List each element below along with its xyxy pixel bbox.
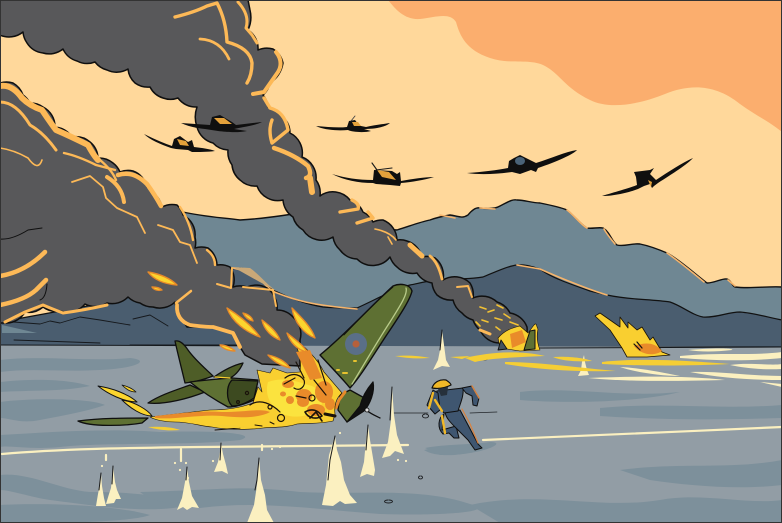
face (438, 387, 448, 396)
propeller (372, 163, 392, 170)
wreck puff highlights (476, 305, 518, 330)
plane: lower centre (332, 163, 434, 186)
plane: tail section (78, 341, 258, 425)
orange fire patches (155, 350, 335, 418)
canopy (377, 170, 396, 180)
plane: upper centre (316, 116, 390, 132)
distant fire core (634, 343, 662, 354)
mountain ridge band (233, 267, 278, 292)
distant fire char (634, 342, 642, 350)
canopy (177, 139, 189, 146)
main fire (150, 337, 342, 430)
horizon line (0, 345, 782, 348)
upper smoke highlights (175, 2, 490, 334)
soldier shadow (424, 447, 476, 455)
propeller (347, 382, 380, 422)
back leg (439, 414, 459, 438)
leg orange stripe (462, 409, 478, 443)
crossing wake line (2, 427, 782, 454)
distant fire (595, 313, 670, 357)
plane: back left (144, 134, 215, 152)
wing edge highlight (352, 288, 406, 384)
plane: wing with roundel (320, 284, 412, 388)
waterline behind soldier (393, 412, 497, 413)
spinner (365, 408, 369, 412)
roundel (345, 333, 367, 355)
nose of plane (336, 382, 380, 422)
roundel centre (352, 340, 360, 348)
left wing (78, 418, 148, 425)
torso (436, 388, 463, 413)
plane: upper left on smoke (181, 115, 262, 132)
splash dark spines (99, 330, 442, 490)
plane: right centre (467, 150, 577, 174)
back mountains (183, 200, 782, 346)
soldier running (424, 380, 482, 455)
flame licks (98, 272, 315, 416)
wing panel line (344, 287, 393, 335)
orange cloud (388, 0, 782, 132)
arm highlight (472, 386, 479, 398)
distant wreck burn (510, 330, 526, 348)
mountain highlights (233, 208, 735, 309)
front mountains (0, 265, 782, 347)
yellow straps (429, 393, 445, 433)
canopy (515, 157, 525, 165)
big left smoke (0, 82, 301, 366)
helmet (432, 380, 451, 388)
distant wreck fin (498, 340, 507, 350)
distant wreck (498, 324, 540, 351)
lighter water haze on mountain (2, 325, 37, 333)
charred debris scribbles (215, 360, 335, 430)
upper smoke plume (0, 0, 527, 343)
distant wreck tail (524, 330, 535, 350)
flame core (267, 379, 322, 417)
water shadows (0, 358, 782, 523)
left smoke inner contours (0, 228, 47, 300)
canopy (214, 118, 232, 124)
water (0, 345, 782, 523)
white reflections (588, 348, 782, 387)
spray droplets (102, 433, 406, 478)
water splashes (96, 330, 589, 523)
mountain contour lines (13, 315, 290, 345)
propeller (351, 116, 355, 121)
debris rings on water (384, 356, 489, 503)
wing fire dots (337, 361, 356, 373)
canopy (648, 180, 652, 187)
yellow reflections (148, 352, 730, 430)
front arm (462, 386, 479, 406)
nose ring (336, 392, 345, 408)
canopy (352, 122, 361, 126)
back arm (427, 390, 440, 414)
front leg (445, 410, 482, 450)
plane: far right (602, 158, 693, 196)
left smoke highlights (0, 86, 276, 347)
